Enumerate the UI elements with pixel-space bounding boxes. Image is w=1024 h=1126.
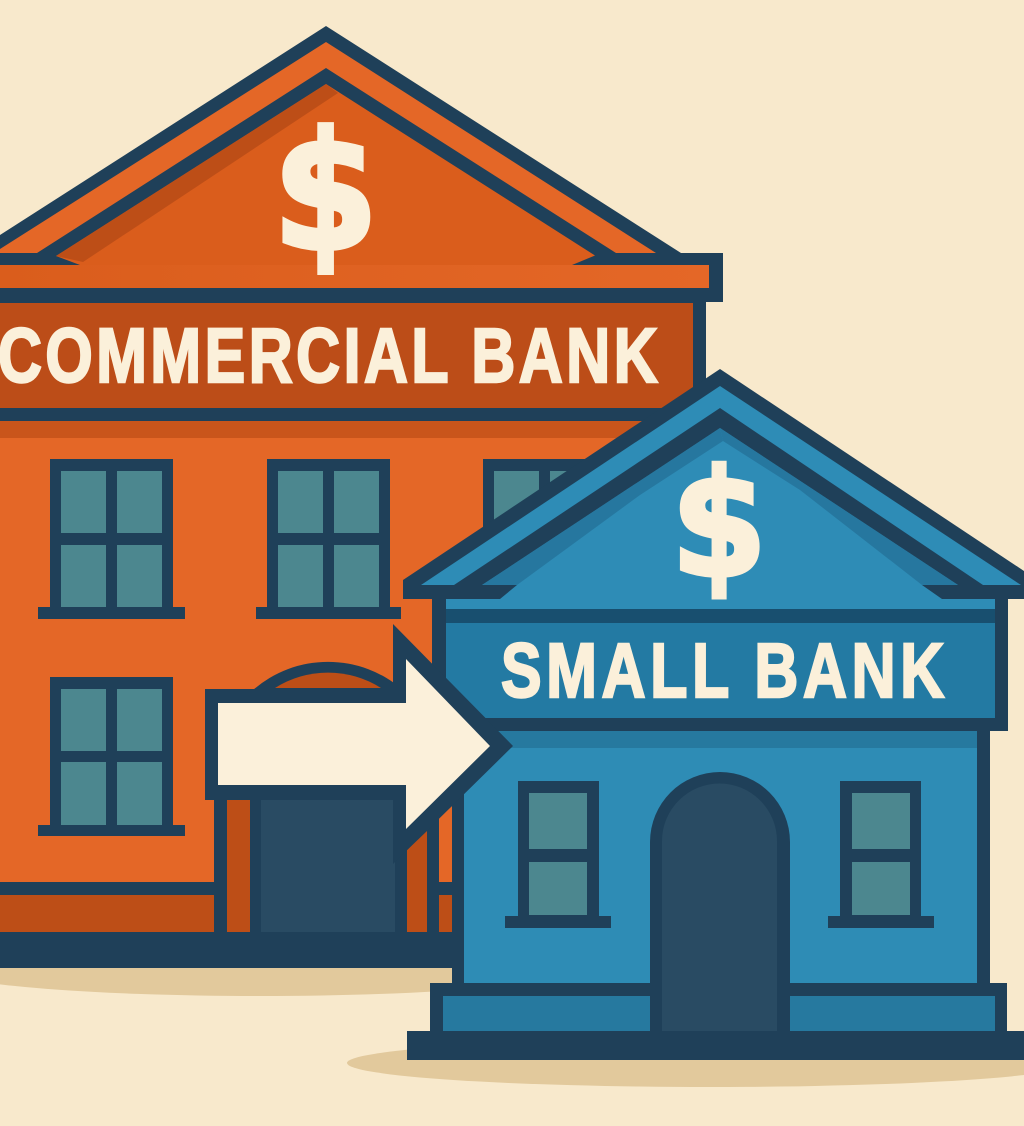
commercial bank sign xyxy=(0,303,693,408)
window: upper centre xyxy=(256,459,401,619)
arrow: commercial bank to small bank xyxy=(205,624,513,864)
sign text: commercial bank: COMMERCIAL BANK xyxy=(0,312,658,399)
building: commercial bank xyxy=(0,26,723,968)
window: upper right xyxy=(483,459,606,559)
window: lower left xyxy=(38,677,185,836)
door and columns: commercial bank xyxy=(214,790,464,933)
small bank roof xyxy=(403,369,1024,731)
window: upper left xyxy=(38,459,185,619)
window: small bank left xyxy=(505,781,611,928)
sign text: small bank: SMALL BANK xyxy=(501,627,944,714)
commercial bank wall xyxy=(0,302,706,942)
door: small bank xyxy=(650,772,790,1031)
building: small bank xyxy=(403,369,1024,1060)
commercial bank roof xyxy=(0,26,723,302)
ground shadow: small bank xyxy=(347,1039,1024,1087)
ground shadow: commercial bank xyxy=(0,940,580,996)
small bank wall xyxy=(452,731,990,985)
dollar sign: small bank: $ xyxy=(671,438,767,611)
dollar sign: commercial bank: $ xyxy=(273,98,378,288)
plinth: small bank xyxy=(407,983,1024,1060)
small bank sign xyxy=(446,609,995,718)
door arch: commercial bank xyxy=(253,662,403,690)
window: small bank right xyxy=(828,781,934,928)
plinth: commercial bank xyxy=(0,882,464,968)
